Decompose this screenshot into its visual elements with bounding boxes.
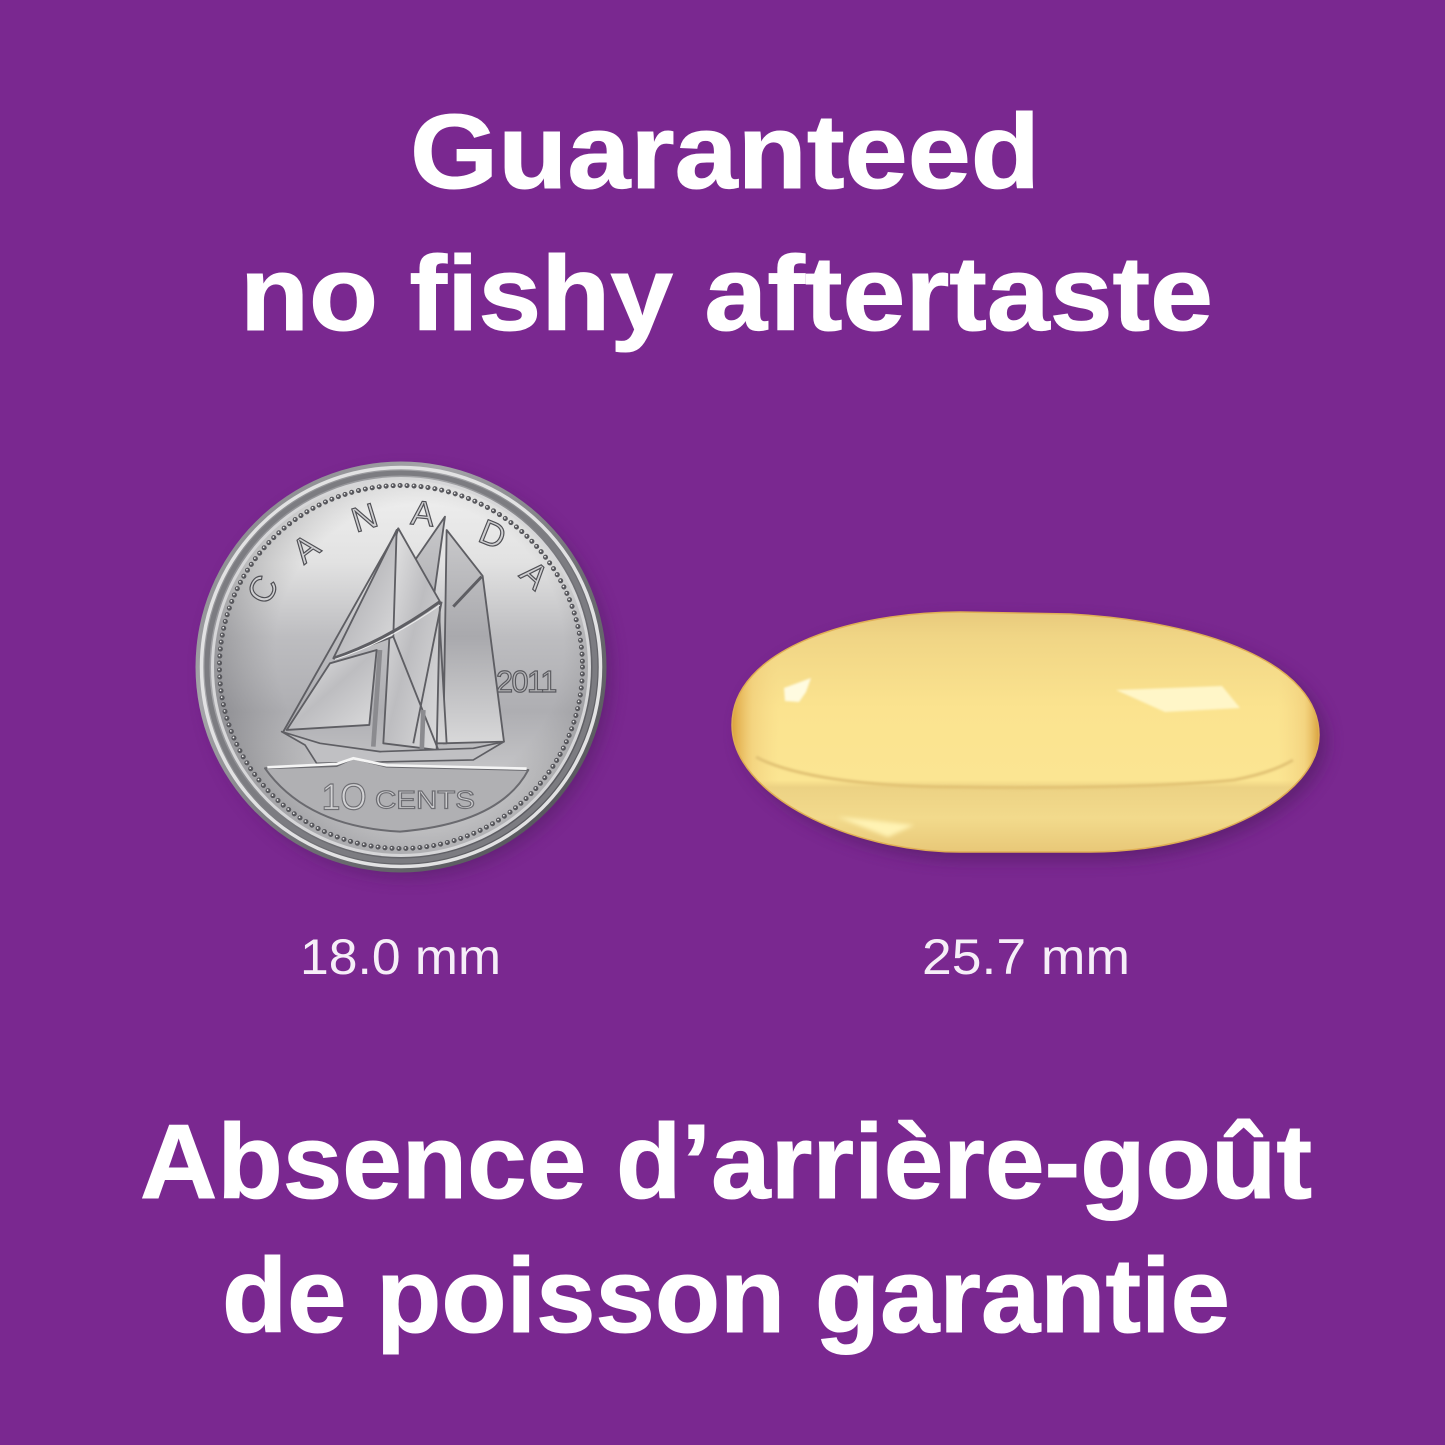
- coin legend: CANADA: D: [474, 513, 511, 557]
- softgel capsule: [732, 612, 1327, 860]
- coin value: 10 CENTS: [322, 775, 475, 817]
- capsule seam: [756, 757, 1293, 788]
- measurement: capsule length: 25.7 mm: [922, 929, 1130, 985]
- title: French heading: Absence d’arrière-goût: [140, 1103, 1312, 1221]
- coin shadow: [204, 470, 612, 878]
- coin: Canadian 10 cents: [196, 462, 612, 878]
- coin face: [214, 480, 588, 854]
- capsule body: [732, 612, 1319, 852]
- schooner sails: [283, 517, 504, 753]
- measurement: coin diameter: 18.0 mm: [300, 929, 501, 985]
- coin legend: CANADA: N: [347, 497, 382, 540]
- coin value: 10 CENTS: 1O: [322, 775, 367, 817]
- coin bead ring: [220, 486, 582, 848]
- title: English heading: Guaranteed: [410, 93, 1040, 211]
- title: English heading: no fishy aftertaste: [240, 235, 1213, 353]
- coin legend: CANADA: A: [409, 494, 437, 534]
- coin legend: CANADA: [238, 494, 556, 610]
- title: French heading: [140, 1103, 1312, 1355]
- coin legend: CANADA: A: [513, 554, 556, 598]
- title: English heading: [240, 93, 1213, 353]
- coin value: 10 CENTS: CENTS: [375, 787, 475, 815]
- coin date: 2011: 2011: [496, 665, 557, 699]
- sea and value panel: [265, 758, 528, 832]
- title: French heading: de poisson garantie: [222, 1237, 1230, 1355]
- capsule highlights: [784, 678, 1240, 837]
- schooner hull: [282, 732, 504, 763]
- coin legend: CANADA: A: [286, 527, 328, 571]
- capsule shadow: [740, 619, 1327, 860]
- coin rim: [196, 462, 606, 872]
- coin legend: CANADA: C: [238, 568, 287, 610]
